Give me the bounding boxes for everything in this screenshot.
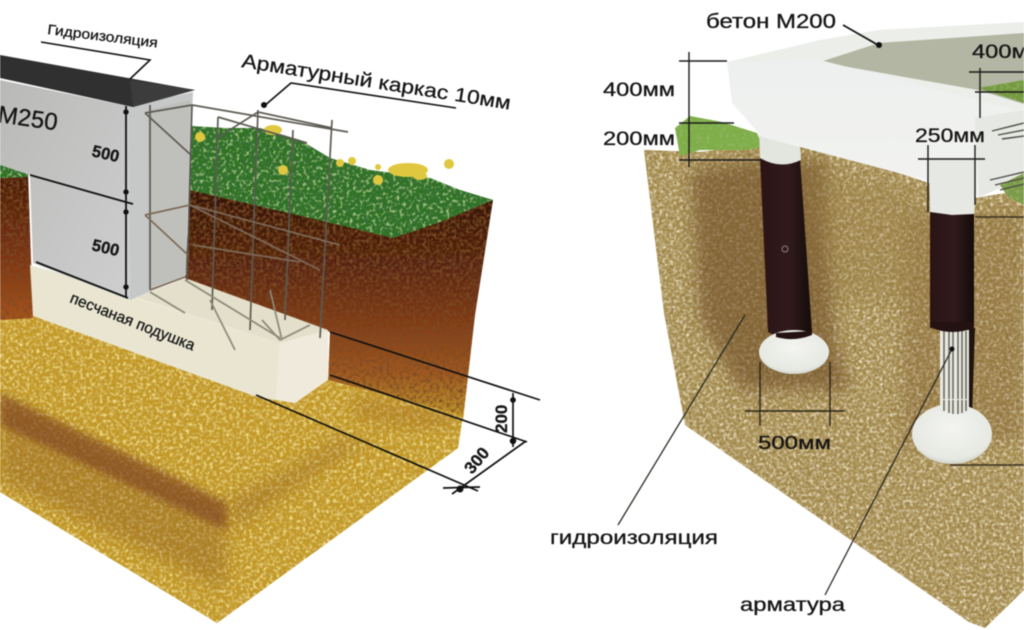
left soil piece bbox=[0, 156, 33, 320]
label: waterproofing bbox=[550, 315, 745, 549]
pile base bulb bbox=[912, 404, 992, 464]
exposed rebar bbox=[940, 330, 969, 418]
label: waterproofing bbox=[41, 21, 159, 79]
label: rebar bbox=[740, 346, 954, 616]
pile concrete head bbox=[759, 130, 801, 165]
label: 250 mm bbox=[915, 126, 985, 212]
label: rebar frame: Арматурный каркас 10мм bbox=[240, 50, 512, 114]
label: waterproofing: Гидроизоляция bbox=[47, 21, 159, 51]
concrete grillage bbox=[727, 22, 1024, 215]
grass patch bbox=[675, 116, 763, 156]
label: 250 mm: 250мм bbox=[915, 126, 985, 147]
height 500 upper: 500 bbox=[90, 142, 121, 166]
left pile bbox=[759, 130, 829, 374]
sand base bbox=[0, 300, 463, 623]
wall dimension lines bbox=[30, 106, 133, 298]
grass strip bbox=[190, 126, 493, 238]
soil block bbox=[644, 140, 1024, 628]
rebar cage bbox=[145, 105, 348, 350]
height 500 lower: 500 bbox=[90, 236, 121, 260]
label: 500 mm: 500мм bbox=[758, 433, 831, 453]
label: 400 mm left bbox=[603, 52, 760, 167]
value 300: 300 bbox=[461, 444, 493, 478]
right pile bbox=[912, 212, 992, 464]
dimension 200 and 300 bbox=[256, 332, 540, 494]
brown soil block bbox=[185, 188, 493, 420]
label: concrete M200 bbox=[706, 11, 882, 48]
label: concrete M200: бетон М200 bbox=[706, 11, 836, 33]
panel: pile foundation bbox=[550, 11, 1024, 628]
label: 400 mm right bbox=[969, 42, 1024, 118]
sand cushion slab bbox=[30, 265, 328, 403]
sand cushion label: песчаная подушка bbox=[68, 290, 198, 355]
label: rebar: арматура bbox=[740, 595, 846, 616]
pile base bulb bbox=[759, 330, 829, 374]
value 200: 200 bbox=[492, 405, 511, 433]
label: 200 mm: 200мм bbox=[603, 129, 675, 150]
panel: strip foundation bbox=[0, 21, 540, 623]
flowers bbox=[195, 125, 454, 185]
extension lines right bbox=[950, 217, 1024, 465]
concrete wall M250 bbox=[0, 55, 195, 300]
label: 400 mm left: 400мм bbox=[603, 80, 675, 101]
label: 500 mm bbox=[745, 362, 845, 453]
waterproofing cap bbox=[0, 55, 195, 107]
label: waterproofing: гидроизоляция bbox=[550, 528, 718, 549]
